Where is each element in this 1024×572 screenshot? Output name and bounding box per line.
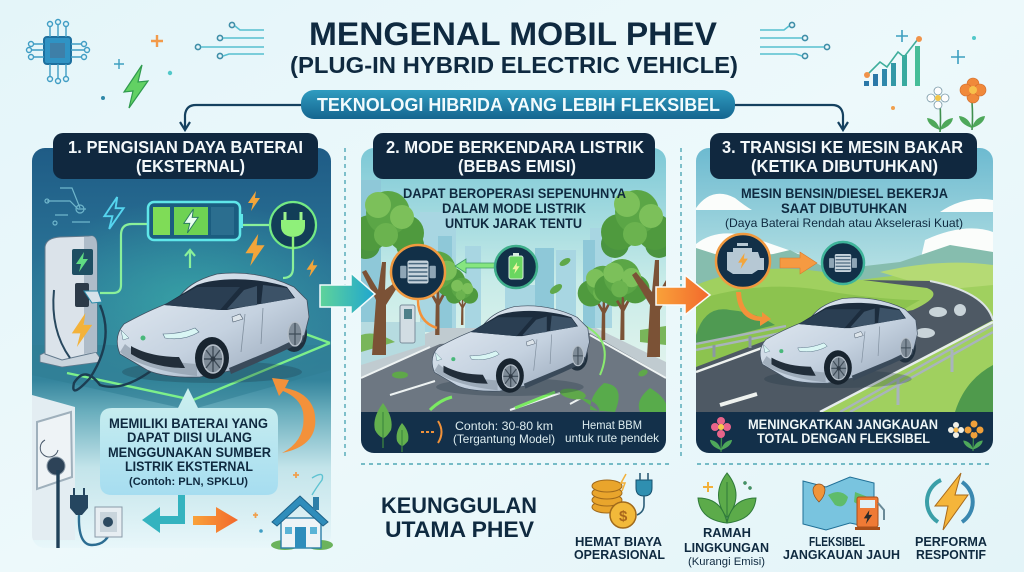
title	[290, 16, 738, 78]
advantage: responsive performance	[915, 473, 988, 562]
panel 1 header	[53, 133, 318, 179]
tagline pill: TEKNOLOGI HIBRIDA YANG LEBIH FLEKSIBEL	[317, 95, 720, 115]
label: FLEKSIBEL	[809, 534, 865, 549]
panel 1 header: 1. PENGISIAN DAYA BATERAI	[68, 137, 303, 157]
info band: TOTAL DENGAN FLEKSIBEL	[757, 430, 930, 446]
icon: motor circle	[391, 245, 445, 299]
label: JANGKAUAN JAUH	[783, 547, 900, 562]
circuit lines left	[195, 22, 264, 59]
panel 2 description: UNTUK JARAK TENTU	[445, 215, 582, 231]
label	[783, 534, 900, 562]
panel 1 header: (EKSTERNAL)	[136, 156, 245, 176]
arrows from tagline	[180, 105, 848, 130]
advantage: cost saving	[574, 473, 665, 562]
label	[684, 525, 769, 568]
orange connector	[418, 300, 437, 328]
advantages heading	[381, 493, 537, 542]
label: LINGKUNGAN	[684, 540, 769, 555]
orange curved arrow	[736, 292, 771, 326]
title: (PLUG-IN HYBRID ELECTRIC VEHICLE)	[290, 52, 738, 78]
panel 3 header: (KETIKA DIBUTUHKAN)	[751, 156, 938, 176]
label: RAMAH	[703, 525, 751, 540]
info band: Contoh: 30-80 km	[455, 419, 553, 433]
advantage: eco friendly	[684, 473, 769, 568]
icon: plug circle	[270, 202, 316, 250]
panel 3: engine transition	[696, 148, 993, 453]
city scene	[352, 148, 673, 413]
charging station	[40, 236, 175, 390]
advantage: long range	[783, 477, 900, 562]
panel 2 header: (BEBAS EMISI)	[458, 156, 576, 176]
icon: coins and plug: $	[619, 508, 628, 525]
callout: LISTRIK EKSTERNAL	[125, 459, 253, 474]
callout: MENGGUNAKAN SUMBER	[108, 445, 271, 460]
teal left arrow	[142, 495, 185, 533]
icon: lightning ring	[927, 473, 973, 530]
info band	[696, 412, 993, 453]
orange arrow	[780, 252, 817, 274]
icon: engine circle	[716, 234, 770, 288]
panel 3 description: (Daya Baterai Rendah atau Akselerasi Kuat)	[725, 216, 963, 230]
orange bolts	[245, 191, 317, 277]
teal arrow to panel 2	[320, 273, 375, 315]
panel 3 description	[725, 185, 963, 230]
info band	[361, 403, 666, 453]
icon: motor circle	[822, 242, 864, 284]
panel 2 header: 2. MODE BERKENDARA LISTRIK	[386, 137, 644, 157]
icon: leaves	[698, 473, 756, 523]
label	[915, 534, 988, 562]
green arrow	[455, 259, 495, 273]
neon charge lines	[100, 224, 293, 293]
label: RESPONTIF	[916, 547, 986, 562]
icon: growth chart	[864, 30, 976, 110]
icon: battery circle	[495, 246, 537, 288]
dashed dividers	[345, 148, 993, 464]
label: HEMAT BIAYA	[575, 534, 663, 549]
panel 3 header	[710, 133, 977, 179]
panel 2: electric mode	[352, 148, 673, 453]
label: OPERASIONAL	[574, 547, 665, 562]
car electric	[432, 306, 589, 396]
panel 2 description	[403, 185, 626, 231]
panel 2 header	[373, 133, 655, 179]
orange curved arrow	[272, 378, 315, 453]
callout: MEMILIKI BATERAI YANG	[109, 416, 268, 431]
callout: DAPAT DIISI ULANG	[127, 430, 252, 445]
plug and socket	[70, 488, 122, 545]
car on highway	[760, 298, 917, 388]
orange arrow to panel 3	[656, 275, 710, 315]
panel 1 background	[32, 148, 331, 542]
icon: blue bolt	[104, 197, 124, 229]
highway scene	[696, 148, 993, 413]
icon: house	[253, 472, 333, 550]
icon: flowers top right	[927, 78, 986, 132]
info band: untuk rute pendek	[565, 431, 660, 445]
orange right arrow	[193, 507, 238, 533]
wall outlet	[37, 412, 72, 548]
tagline pill	[301, 90, 735, 119]
label: (Kurangi Emisi)	[688, 556, 765, 568]
info band: (Tergantung Model)	[453, 432, 555, 446]
battery	[148, 202, 243, 240]
info band: MENINGKATKAN JANGKAUAN	[748, 416, 938, 432]
callout: (Contoh: PLN, SPKLU)	[129, 476, 248, 488]
panel 2 description: DALAM MODE LISTRIK	[442, 200, 586, 216]
label: PERFORMA	[915, 534, 988, 549]
info band: Hemat BBM	[582, 418, 642, 432]
panel 1: charging	[32, 148, 333, 550]
label	[574, 534, 665, 562]
circuit lines right	[760, 22, 830, 59]
icon: chip	[26, 20, 90, 84]
title: MENGENAL MOBIL PHEV	[309, 16, 718, 52]
car charging	[117, 273, 309, 383]
panel 3 description: SAAT DIBUTUHKAN	[781, 200, 907, 216]
advantages heading: UTAMA PHEV	[385, 517, 534, 542]
panel 3 description: MESIN BENSIN/DIESEL BEKERJA	[741, 185, 948, 201]
circuit decoration	[45, 188, 90, 225]
icon: sparkles and bolt left	[101, 35, 172, 108]
advantages heading: KEUNGGULAN	[381, 493, 537, 518]
panel 3 header: 3. TRANSISI KE MESIN BAKAR	[722, 137, 963, 157]
panel 2 description: DAPAT BEROPERASI SEPENUHNYA	[403, 185, 626, 201]
callout	[100, 388, 278, 495]
icon: map and fuel pump	[803, 477, 884, 530]
